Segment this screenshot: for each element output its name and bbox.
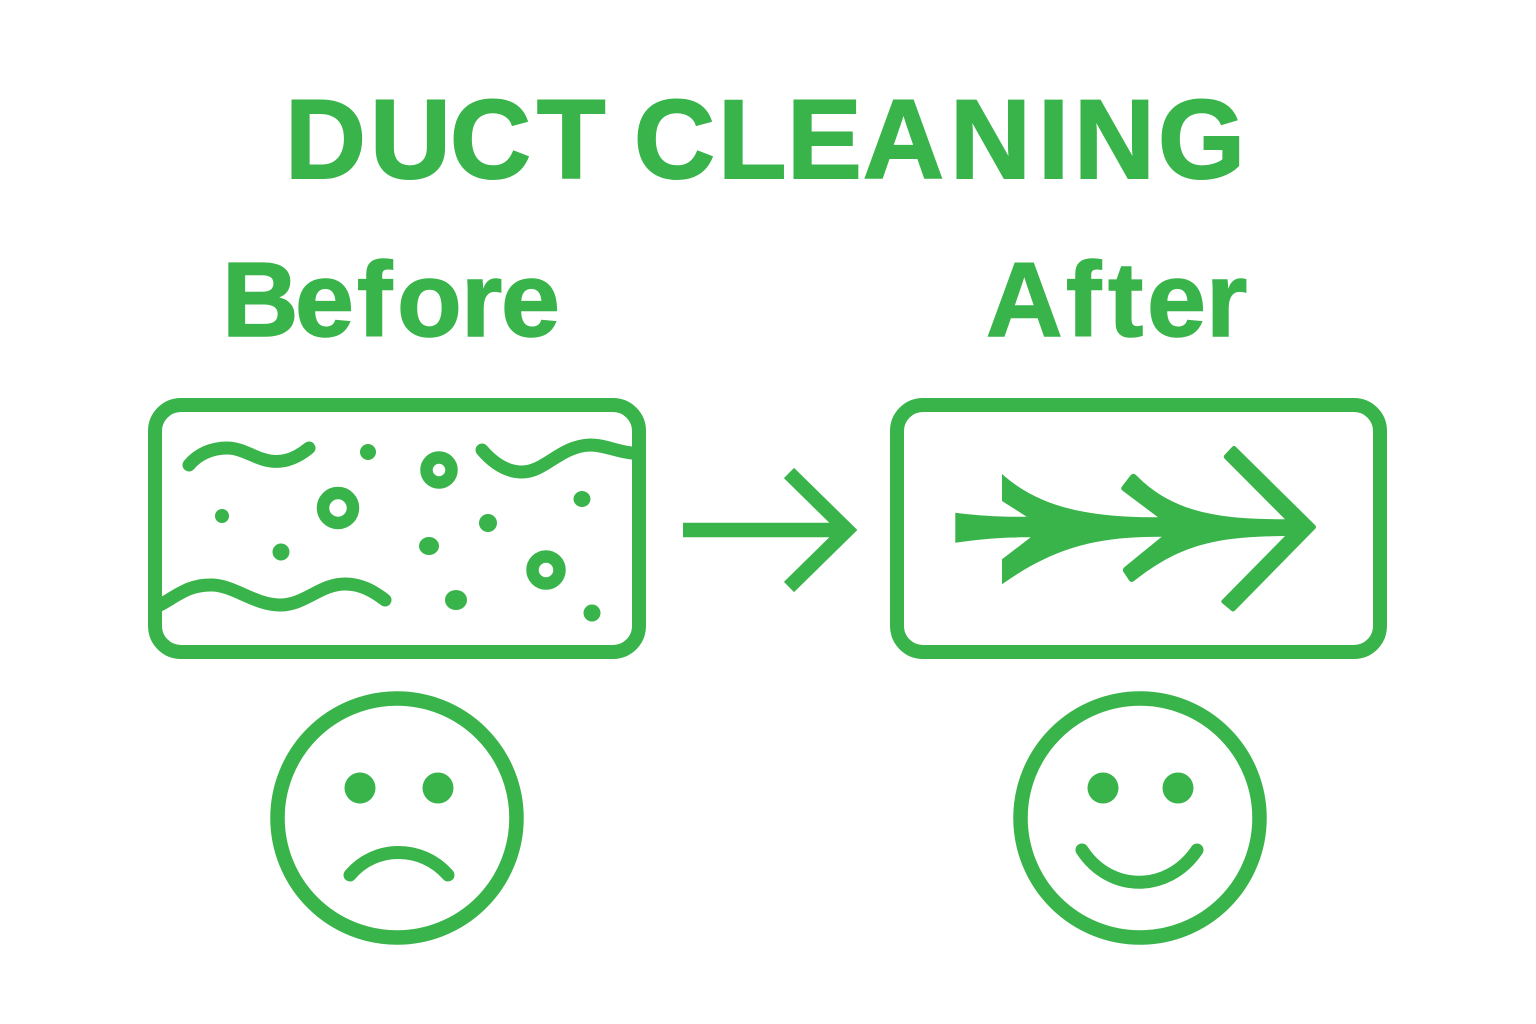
dirt specks [215, 444, 600, 622]
panel: dirty duct [155, 405, 639, 652]
heading: after: After [986, 241, 1247, 359]
dirt streak top left [189, 448, 309, 465]
panel: clean duct [897, 405, 1380, 652]
icon: sad face [278, 698, 516, 938]
dirt rings [323, 458, 560, 584]
airflow arrows [955, 446, 1316, 612]
dirt streak bottom [160, 584, 385, 605]
eyes [1088, 772, 1194, 804]
eyes [344, 772, 454, 804]
smile [1082, 850, 1197, 882]
title: DUCT CLEANING [285, 77, 1245, 202]
heading: before: Before [222, 241, 560, 359]
dirt streak top right [482, 445, 632, 472]
icon: happy face [1020, 698, 1260, 938]
arrow between panels [683, 473, 847, 587]
frown [350, 852, 448, 875]
